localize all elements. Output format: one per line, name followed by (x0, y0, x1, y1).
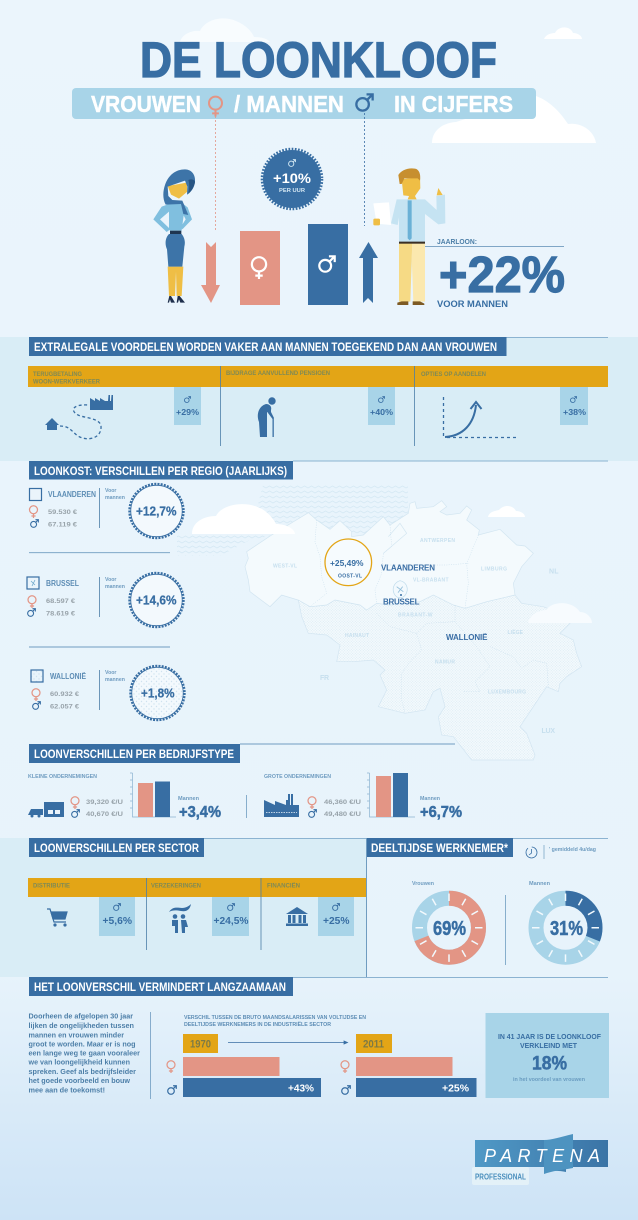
paragraph: lijken de ongelijkheden tussen (28, 1021, 134, 1030)
donut: mannen 31%: 31% (550, 918, 583, 940)
kleine ondernemingen: +3,4% (179, 804, 221, 821)
icon: factory (264, 794, 299, 817)
province labels: FR (320, 675, 329, 682)
region labels: BRUSSEL (383, 597, 420, 606)
grote ondernemingen: 49,480 €/U (324, 811, 361, 818)
arrow: 1970 to 2011 (228, 1041, 348, 1044)
region: Flanders (245, 501, 533, 610)
chart caption: DEELTIJDSE WERKNEMERS IN DE INDUSTRIËLE SECTOR (184, 1021, 331, 1028)
paragraph: mannen en vrouwen minder (28, 1030, 124, 1039)
province labels: WEST-VL (273, 564, 297, 570)
province labels: HAINAUT (345, 633, 369, 639)
province labels: LUX (542, 728, 555, 735)
stat: jaarloon +22%: +22% (439, 246, 565, 303)
cloud: right (432, 96, 596, 143)
heading: HET LOONVERSCHIL VERMINDERT LANGZAAMAAN (34, 982, 286, 994)
region: Wallonië: Voor (105, 670, 116, 676)
cloud: top right (544, 27, 582, 39)
chart: 1970: +43% (288, 1084, 314, 1094)
illustration: woman (153, 169, 195, 303)
paragraph: Doorheen de afgelopen 30 jaar (28, 1012, 133, 1021)
donut: vrouwen 69% (412, 881, 482, 962)
province borders (310, 520, 548, 713)
chart: 2011 (341, 1034, 476, 1097)
stat: jaarloon +22% (425, 237, 565, 309)
province labels: LUXEMBOURG (488, 689, 526, 695)
orange header bar: OPTIES OP AANDELEN (421, 371, 486, 378)
arrow: up blue (359, 242, 378, 303)
region: Wallonië: 62.057 € (50, 703, 79, 710)
region: Brussel: BRUSSEL (46, 579, 79, 588)
kleine ondernemingen: Mannen (178, 796, 199, 802)
icon: clock (526, 847, 537, 858)
region: Wallonië: WALLONIË (50, 672, 87, 681)
wave pattern sea (177, 485, 408, 556)
chart caption: VERSCHIL TUSSEN DE BRUTO MAANDSALARISSEN VAN VOLTIJDSE EN (184, 1015, 366, 1021)
donut: vrouwen 69%: 69% (433, 918, 466, 940)
heading: LOONVERSCHILLEN PER SECTOR (34, 843, 200, 855)
province labels: VL-BRABANT (413, 578, 448, 584)
bar: female (240, 231, 280, 305)
kleine ondernemingen (28, 773, 221, 821)
callout: Oost-Vlaanderen (325, 539, 372, 586)
kleine ondernemingen: KLEINE ONDERNEMINGEN (28, 774, 97, 780)
stat box: +38%: +38% (563, 407, 586, 417)
region: Vlaanderen: Voor (105, 488, 116, 494)
badge: +10% per uur (262, 149, 322, 209)
heading: loonkost: LOONKOST: VERSCHILLEN PER REGIO (JAARLIJKS) (34, 466, 287, 478)
title: DE LOONKLOOF (140, 32, 497, 88)
region: Vlaanderen: +12,7% (136, 504, 177, 518)
subtitle bar: / MANNEN (234, 91, 344, 117)
heading (29, 337, 506, 356)
icon: rising chart (444, 397, 518, 438)
heading: DEELTIJDSE WERKNEMER* (371, 843, 508, 855)
heading (29, 977, 293, 996)
bar chart (130, 773, 176, 817)
icon: family under umbrella (169, 904, 191, 933)
province labels: NAMUR (435, 660, 455, 666)
subtitle bar: VROUWEN (91, 91, 201, 117)
panel: loonverschil vermindert (28, 977, 609, 1099)
province labels: BRABANT-W (398, 612, 433, 618)
grote ondernemingen: +6,7% (420, 804, 462, 821)
callout: 18%: IN 41 JAAR IS DE LOONKLOOF (498, 1032, 601, 1041)
bar chart (367, 773, 415, 817)
donut: vrouwen 69%: Vrouwen (412, 881, 434, 887)
heading: EXTRALEGALE VOORDELEN WORDEN VAKER AAN MANNEN TOEGEKEND DAN AAN VROUWEN (34, 342, 497, 354)
region: Wallonië: 60.932 € (50, 691, 79, 698)
donut: mannen 31%: Mannen (529, 881, 550, 887)
map of Belgium (177, 485, 582, 760)
region: Brussel: 68.597 € (46, 598, 75, 605)
orange header bar: BIJDRAGE AANVULLEND PENSIOEN (226, 370, 330, 377)
orange header bar: WOON-WERKVERKEER (33, 378, 101, 386)
province labels: NL (549, 568, 559, 576)
icon: male sign (356, 94, 373, 111)
region: Brussel: +14,6% (136, 592, 177, 608)
province labels: LIMBURG (481, 566, 507, 572)
region: Brussel: Voor (105, 577, 116, 583)
region: Wallonië (31, 666, 184, 720)
kleine ondernemingen: 39,320 €/U (86, 799, 123, 806)
panel: per sector (0, 838, 608, 977)
stat box: +5,6%: +5,6% (102, 916, 132, 927)
grote ondernemingen: GROTE ONDERNEMINGEN (264, 774, 331, 780)
stat box: +5,6% (99, 897, 135, 936)
icon: commute (45, 395, 113, 439)
icon: female sign (209, 97, 222, 116)
region labels: WALLONIË (446, 633, 488, 642)
stat: jaarloon +22%: JAARLOON: (437, 237, 477, 246)
province labels: LIÈGE (508, 628, 524, 636)
stat box: +40%: +40% (370, 407, 393, 417)
callout: Oost-Vlaanderen: OOST-VL (338, 573, 362, 579)
logo: Partena Professional: PARTENA (484, 1146, 600, 1166)
dashed connector: male (364, 113, 366, 226)
paragraph (28, 1012, 140, 1094)
stat box: +38% (560, 387, 588, 425)
orange header bar (28, 366, 608, 387)
paragraph: een lange weg te gaan vooraleer (28, 1049, 140, 1058)
dashed connector: female (214, 116, 216, 232)
logo: Partena Professional (472, 1134, 608, 1185)
grote ondernemingen: Mannen (420, 796, 440, 802)
grote ondernemingen: 46,360 €/U (324, 799, 361, 806)
icon: old man with cane (258, 397, 276, 437)
grote ondernemingen (264, 773, 462, 821)
panel: extralegale voordelen (0, 337, 638, 461)
paragraph: we van loongelijkheid kunnen (28, 1058, 130, 1067)
callout: 18%: 18% (532, 1054, 567, 1074)
panel: bedrijfstype (28, 744, 462, 821)
heading: loonkost (29, 461, 293, 480)
region: Brussel: 78.619 € (46, 610, 75, 618)
province labels: ANTWERPEN (420, 538, 455, 544)
region: Brussel (27, 573, 184, 627)
cloud: map right (528, 603, 592, 623)
panel: deeltijdse werknemer (367, 838, 599, 965)
region: Vlaanderen (30, 484, 184, 538)
badge: +10% per uur: +10% (273, 170, 312, 186)
orange header bar (28, 878, 366, 897)
badge: +10% per uur: PER UUR (279, 188, 305, 194)
region: Brussels (393, 581, 407, 598)
callout: Oost-Vlaanderen: +25,49% (330, 558, 364, 568)
region: Vlaanderen: 67.119 € (48, 522, 77, 528)
region: Vlaanderen: mannen (105, 495, 125, 501)
stat box: +40% (368, 387, 395, 425)
subtitle bar (72, 88, 536, 119)
heading: LOONVERSCHILLEN PER BEDRIJFSTYPE (34, 749, 234, 761)
icon: shopping cart (47, 909, 67, 926)
icon: truck and shop (28, 802, 64, 818)
stat box: +24,5%: +24,5% (214, 916, 249, 927)
donut: mannen 31% (529, 881, 599, 962)
paragraph: groot te worden. Maar er is nog (28, 1039, 136, 1048)
arrow: down pink (201, 242, 220, 303)
region: Vlaanderen: 59.530 € (48, 509, 77, 516)
orange header bar: DISTRIBUTIE (33, 882, 70, 890)
cloud: map left (192, 504, 295, 534)
heading (367, 838, 513, 857)
heading (29, 838, 204, 857)
region labels: VLAANDEREN (381, 564, 435, 573)
stat box: +29% (174, 387, 201, 425)
region: Brussel: mannen (105, 584, 125, 590)
kleine ondernemingen: 40,670 €/U (86, 811, 123, 818)
callout: 18% (486, 1013, 609, 1098)
paragraph: het goede voorbeeld en bouw (28, 1076, 130, 1085)
region: Wallonië: mannen (105, 677, 125, 683)
orange header bar: TERUGBETALING (33, 371, 82, 378)
cloud: top centre (180, 18, 270, 42)
subtitle bar: IN CIJFERS (394, 91, 513, 117)
stat: jaarloon +22%: VOOR MANNEN (437, 299, 508, 309)
region labels (381, 564, 488, 642)
chart: 1970: 1970 (190, 1038, 211, 1050)
cloud: map top (488, 506, 525, 517)
chart: 2011: +25% (442, 1084, 469, 1094)
orange header bar: VERZEKERINGEN (151, 882, 201, 890)
region: Wallonië: +1,8% (141, 686, 175, 700)
chart: 1970 (167, 1034, 321, 1097)
stat box: +25%: +25% (323, 916, 350, 927)
callout: 18%: in het voordeel van vrouwen (513, 1077, 585, 1083)
panel: deeltijdse werknemer: ' gemiddeld 4u/dag (549, 847, 596, 853)
icon: bank (286, 907, 308, 926)
paragraph: mee aan de toekomst! (28, 1085, 105, 1094)
stat box: +24,5% (212, 897, 249, 936)
stat box: +25% (318, 897, 354, 936)
callout: 18%: VERKLEIND MET (520, 1041, 577, 1050)
paragraph: spreken. Geef als bedrijfsleider (28, 1067, 136, 1076)
bar: male (308, 224, 348, 305)
region: Vlaanderen: VLAANDEREN (48, 490, 96, 499)
heading (29, 744, 240, 763)
chart caption (184, 1015, 366, 1028)
province labels (273, 538, 559, 735)
stat box: +29%: +29% (176, 407, 199, 417)
region: Wallonia (270, 595, 582, 760)
illustration: man (373, 168, 445, 305)
chart: 2011: 2011 (363, 1038, 384, 1050)
logo: Partena Professional: PROFESSIONAL (475, 1172, 526, 1182)
orange header bar: FINANCIËN (267, 882, 301, 890)
